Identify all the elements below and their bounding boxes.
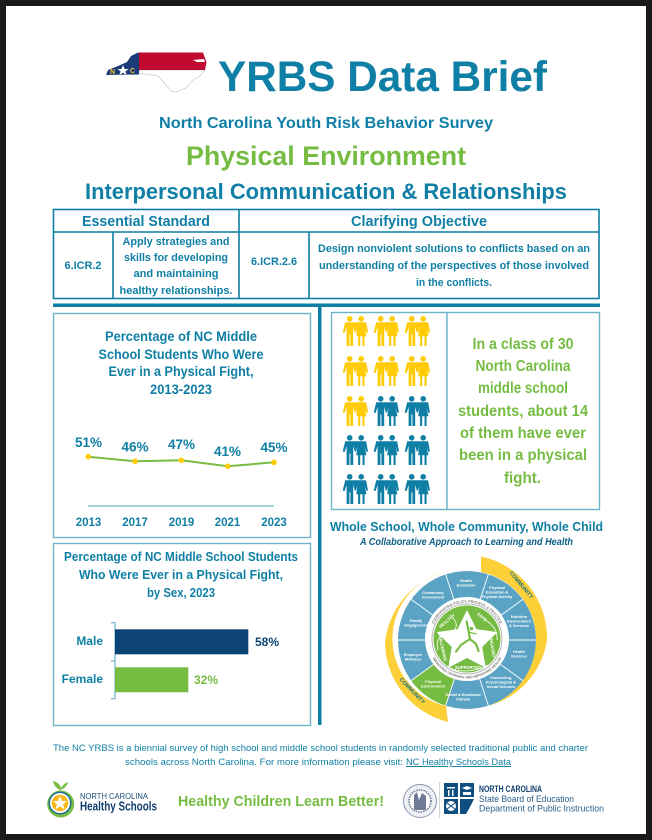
segment labels: Physical [425, 679, 441, 684]
segment labels: Environment [421, 684, 446, 688]
year labels: 2021 [215, 517, 241, 529]
panel: bar chart by sex [54, 544, 310, 726]
value labels: 47% [168, 437, 195, 452]
community labels: COMMUNITY [398, 677, 426, 706]
icon: apple with star [47, 781, 74, 818]
segment labels: Physical [489, 585, 505, 590]
icon: North Carolina flag map: C [130, 68, 135, 75]
title: YRBS Data Brief [218, 53, 548, 101]
value: male: 58% [255, 635, 279, 649]
wheel segments [398, 571, 536, 709]
segment labels: Engagement [404, 622, 428, 628]
tenet labels: SAFE [476, 611, 488, 622]
ring text: IMPROVING LEARNING AND IMPROVING HEALTH [432, 657, 502, 678]
panel: class of 30 callout: fight. [504, 470, 541, 487]
line series [86, 454, 277, 469]
diagram: WSCC wheel [385, 556, 548, 722]
segment labels: Involvement [422, 594, 445, 600]
segment labels: Physical Activity [482, 594, 513, 599]
logo: NC DPI: NORTH CAROLINA [479, 784, 542, 794]
tenet labels: HEALTHY [438, 613, 456, 629]
star [437, 610, 497, 668]
segment labels: Social Services [487, 684, 515, 689]
footer note: The NC YRBS is a biennial survey of high school and middle school students in randomly selected traditional public and charter [53, 743, 588, 754]
standard description [120, 236, 232, 297]
icons: teal students [343, 396, 430, 504]
logo: NC DPI: State Board of Education [479, 794, 574, 805]
bar: male [115, 629, 248, 654]
year labels [76, 517, 287, 529]
green hub [434, 606, 500, 672]
objective description: Design nonviolent solutions to conflicts based on an [318, 243, 590, 255]
standard description: and maintaining [134, 268, 218, 280]
segment labels: Climate [456, 696, 471, 702]
label: male: Male [76, 634, 103, 648]
tenet labels [437, 611, 497, 670]
tagline: Healthy Children Learn Better! [178, 793, 384, 810]
year labels: 2019 [169, 517, 194, 529]
value labels: 45% [260, 440, 288, 455]
icon: DPI emblem [444, 783, 474, 814]
segment labels: Employee [404, 652, 423, 657]
panel: class of 30 callout: North Carolina [476, 358, 571, 375]
panel: class of 30 callout: been in a physical [459, 447, 587, 464]
panel: class of 30 callout: of them have ever [460, 425, 586, 442]
icon: jumping figure [456, 622, 478, 652]
panel: class of 30 callout: middle school [478, 380, 568, 397]
community arc: right [481, 556, 547, 705]
segment labels: Counseling, [490, 675, 512, 680]
subtitle: survey name: North Carolina Youth Risk Behavior Survey [159, 115, 493, 132]
segment labels: Education [457, 582, 476, 588]
bar chart title: Percentage of NC Middle School Students [64, 549, 298, 564]
heading: physical environment: Physical Environment [186, 141, 466, 171]
segment labels: Nutrition [511, 614, 528, 619]
bar: female [115, 667, 188, 692]
bar chart title: Who Were Ever in a Physical Fight, [79, 567, 283, 582]
segment labels: Family [410, 618, 423, 623]
value labels: 41% [214, 444, 241, 459]
bar chart title: by Sex, 2023 [147, 585, 215, 600]
value labels: 46% [121, 440, 149, 454]
standards table [53, 209, 599, 298]
tenet labels: CHALLENGED [437, 632, 448, 661]
segment labels: Health [460, 578, 473, 583]
segment labels: Services [511, 654, 527, 658]
tenet labels: ENGAGED [488, 636, 497, 658]
inner ring [425, 597, 509, 681]
tenet labels: SUPPORTED [455, 665, 481, 670]
logo: NC DPI: Department of Public Instruction [479, 804, 604, 814]
logo: NC Healthy Schools [47, 781, 157, 818]
icons: yellow students [343, 316, 430, 426]
value labels [75, 435, 288, 459]
table header: essential standard: Essential Standard [82, 214, 210, 230]
community arc: left [385, 572, 448, 722]
standard description: healthy relationships. [120, 285, 232, 297]
ring text: COORDINATING POLICY, PROCESS, & PRACTICE [432, 600, 502, 624]
panel: class of 30 callout: In a class of 30 [472, 336, 574, 353]
icon: North Carolina flag map [106, 52, 206, 92]
icon: North Carolina flag map: N [110, 69, 115, 76]
panel: class of 30 callout [447, 312, 600, 510]
year labels: 2023 [261, 517, 287, 529]
objective description: in the conflicts. [416, 277, 492, 289]
logo: state seal [404, 784, 436, 818]
chart title: 2013-2023 [150, 382, 212, 397]
chart title: Percentage of NC Middle [105, 329, 257, 344]
chart title: School Students Who Were [98, 347, 264, 362]
community labels: COMMUNITY [508, 570, 534, 601]
value: female: 32% [194, 673, 218, 687]
footer note [53, 743, 588, 768]
bar chart title [64, 549, 298, 600]
community labels [398, 570, 534, 706]
panel: line chart [54, 314, 310, 538]
segment labels: Community [422, 590, 445, 595]
heading: interpersonal communication: Interpersonal Communication & Relationships [85, 179, 567, 204]
segment labels: Wellness [405, 656, 421, 662]
ring text [432, 600, 502, 678]
footer note: schools across North Carolina. For more information please visit: [125, 757, 403, 768]
standard code: 6.ICR.2 [64, 260, 102, 272]
logo: NC Healthy Schools: NORTH CAROLINA [80, 791, 148, 801]
table header: clarifying objective: Clarifying Objective [351, 214, 487, 230]
objective code: 6.ICR.2.6 [251, 256, 297, 268]
chart title [98, 329, 264, 397]
objective description: understanding of the perspectives of those involved [319, 260, 589, 272]
segment labels: & Services [509, 623, 529, 628]
highlighted segment: physical environment [411, 640, 467, 706]
segment labels: Education & [486, 590, 509, 594]
label: female: Female [62, 672, 103, 686]
subheading: collaborative approach: A Collaborative Approach to Learning and Health [359, 537, 573, 548]
objective description [318, 243, 590, 289]
segment labels: Health [513, 649, 526, 654]
year labels: 2013 [76, 517, 101, 529]
segment labels: Environment [507, 618, 532, 624]
standard description: Apply strategies and [122, 236, 230, 248]
standard description: skills for developing [124, 252, 228, 264]
logo: NC Healthy Schools: Healthy Schools [80, 800, 157, 814]
heading: whole school model: Whole School, Whole Community, Whole Child [330, 520, 603, 534]
footer note: NC Healthy Schools Data [406, 757, 512, 768]
segment labels: Social & Emotional [445, 692, 481, 697]
chart title: Ever in a Physical Fight, [108, 364, 254, 379]
panel: class of 30 callout: students, about 14 [458, 403, 588, 420]
panel: pictogram of 30 students [332, 312, 447, 510]
year labels: 2017 [122, 517, 148, 529]
logo: NC DPI [444, 783, 604, 814]
segment labels: Psychological & [486, 680, 516, 684]
segment labels [404, 578, 532, 702]
value labels: 51% [75, 435, 102, 450]
